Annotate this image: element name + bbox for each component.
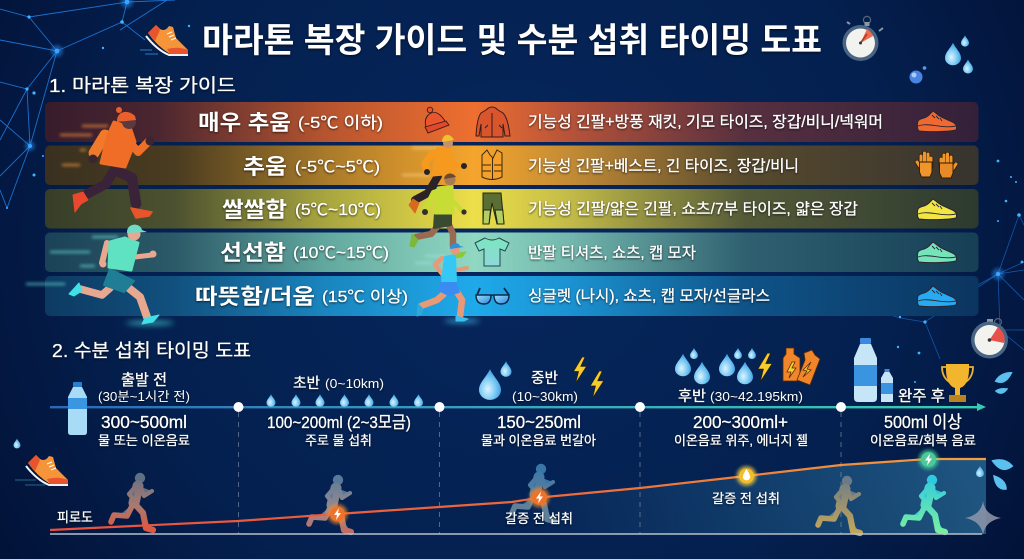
phase 1: before start <box>98 371 190 448</box>
phase 4: late: 200~300ml+ <box>693 412 788 432</box>
row bar: cold <box>45 146 978 185</box>
icon: lightning late phase <box>758 353 772 382</box>
label: chilly: (5℃~10℃) <box>295 202 381 219</box>
label: chilly: 쌀쌀함 <box>222 198 287 222</box>
silhouette: gray runner <box>111 473 153 530</box>
label: very cold: (-5℃ 이하) <box>298 114 383 132</box>
marker: lightning node green <box>918 450 938 470</box>
network pattern: top left <box>0 0 190 209</box>
section heading: hydration timing: 2. 수분 섭취 타이밍 도표 <box>52 340 251 361</box>
network pattern: right <box>835 160 1024 383</box>
icon: t-shirt <box>475 238 509 266</box>
fatigue label: 피로도 <box>57 510 93 525</box>
row bar: warm <box>45 276 978 316</box>
phase 2: early <box>267 375 411 448</box>
icon: beanie <box>425 107 449 133</box>
phase 4: late: (30~42.195km) <box>710 389 803 404</box>
fatigue area under curve <box>512 459 986 534</box>
description: chilly: 기능성 긴팔/얇은 긴팔, 쇼츠/7부 타이즈, 얇은 장갑 <box>528 200 858 218</box>
row bar: cool <box>45 232 978 272</box>
timeline nodes <box>234 402 846 412</box>
clothing descriptions <box>528 113 883 305</box>
runner: cold, yellow-orange jacket <box>409 135 467 213</box>
label: very cold: 매우 추움 <box>198 111 291 135</box>
label: cold: 추움 <box>243 155 287 179</box>
label: warm: (15℃ 이상) <box>322 288 408 306</box>
phase 2: early: (0~10km) <box>325 376 384 391</box>
phase 3: middle: 물과 이온음료 번갈아 <box>481 433 596 448</box>
phase 5: finish: 500ml 이상 <box>884 412 962 432</box>
icon: energy gels <box>783 348 820 385</box>
icon: orange shoe <box>917 111 957 132</box>
label: cold: (-5℃~5℃) <box>295 159 380 176</box>
runner: very cold, orange jacket <box>73 107 154 218</box>
label: chilly <box>222 198 381 222</box>
label: warm: 따뜻함/더움 <box>195 285 315 309</box>
phase 1: before start: 출발 전 <box>121 371 167 389</box>
icon: jacket <box>476 107 510 137</box>
label: cool: (10℃~15℃) <box>293 245 389 262</box>
icon: lightning bolts mid phase <box>574 357 604 398</box>
phase 5: finish: 이온음료/회복 음료 <box>870 433 976 448</box>
baseline <box>50 533 982 535</box>
icon: drops mid phase <box>479 361 512 400</box>
phase 1: before start: 물 또는 이온음료 <box>98 433 190 448</box>
phase 5: finish <box>870 387 976 448</box>
icon: pants <box>483 193 504 224</box>
icon: water bottle <box>68 382 87 435</box>
icon: gloves <box>917 153 956 178</box>
runner: chilly, lime top <box>410 173 467 258</box>
fatigue curve <box>50 459 986 530</box>
description: cold: 기능성 긴팔+베스트, 긴 타이즈, 장갑/비니 <box>528 157 799 175</box>
phase 4: late <box>674 388 808 448</box>
runner: cool, mint tee <box>69 225 159 324</box>
icon: running shoe in title <box>140 25 188 55</box>
icon: large and small bottles <box>854 338 893 402</box>
label: warm <box>195 285 408 309</box>
icon: yellow shoe <box>917 199 957 220</box>
panel: clothing guide rows <box>45 102 978 316</box>
icon: mint shoe <box>917 242 957 263</box>
icon: drops late phase <box>675 348 756 384</box>
phase 4: late: 후반 <box>678 388 706 405</box>
phase dividers <box>238 412 841 534</box>
icon: water drops top right <box>910 35 973 84</box>
phase 2: early: 100~200ml (2~3모금) <box>267 413 411 432</box>
silhouette: woman runner <box>309 475 351 532</box>
phase 3: middle: (10~30km) <box>512 389 578 404</box>
description: warm: 싱글렛 (나시), 쇼츠, 캡 모자/선글라스 <box>528 287 770 305</box>
icon: vest <box>482 150 502 180</box>
callout: drink before thirst 1: 갈증 전 섭취 <box>505 511 573 526</box>
small drops on axis <box>266 394 423 407</box>
phase 1: before start: 300~500ml <box>101 412 187 432</box>
icon: sparkle star <box>965 501 1001 535</box>
row bar: very cold <box>45 102 978 142</box>
phase 1: before start: (30분~1시간 전) <box>98 389 190 404</box>
silhouette: green runner <box>903 475 945 532</box>
label: cold <box>243 155 380 179</box>
silhouette: blue runner <box>512 464 554 521</box>
icon: running shoe left <box>15 455 68 485</box>
icon: trophy <box>942 364 973 402</box>
phase 3: middle <box>481 370 596 448</box>
marker: lightning node 2 <box>530 488 550 508</box>
callout: drink before thirst 2: 갈증 전 섭취 <box>712 491 780 506</box>
label: very cold <box>198 111 383 135</box>
row labels: temperatures <box>195 111 408 309</box>
description: cool: 반팔 티셔츠, 쇼츠, 캡 모자 <box>528 244 696 262</box>
phase 2: early: 초반 <box>293 375 320 392</box>
phase 2: early: 주로 물 섭취 <box>305 433 372 448</box>
section heading: clothing guide: 1. 마라톤 복장 가이드 <box>49 75 236 96</box>
phase 4: late: 이온음료 위주, 에너지 젤 <box>674 433 808 448</box>
marker: lightning node 1 <box>328 504 348 524</box>
speed streaks near runners <box>26 126 445 284</box>
icon: blue shoe <box>917 286 957 307</box>
stopwatch near timeline <box>971 319 1008 358</box>
ground glow under runners <box>126 319 480 325</box>
phase 3: middle: 중반 <box>531 370 558 387</box>
label: cool <box>220 241 389 265</box>
phase 3: middle: 150~250ml <box>497 412 581 432</box>
icon: drops right side <box>976 373 1012 489</box>
description: very cold: 기능성 긴팔+방풍 재킷, 기모 타이즈, 장갑/비니/넥워머 <box>528 113 883 131</box>
title: 마라톤 복장 가이드 및 수분 섭취 타이밍 도표 <box>202 22 822 60</box>
label: cool: 선선함 <box>220 241 286 265</box>
icon: sunglasses <box>476 288 509 304</box>
silhouette: gold runner <box>818 476 860 533</box>
row bar: chilly <box>45 189 978 228</box>
icon: stopwatch in title <box>842 16 883 61</box>
icon: small drop left <box>14 439 20 448</box>
runner: warm, blue singlet <box>417 243 468 321</box>
marker: drop node <box>736 466 756 486</box>
phase 5: finish: 완주 후 <box>898 387 945 405</box>
timeline axis <box>50 403 986 411</box>
